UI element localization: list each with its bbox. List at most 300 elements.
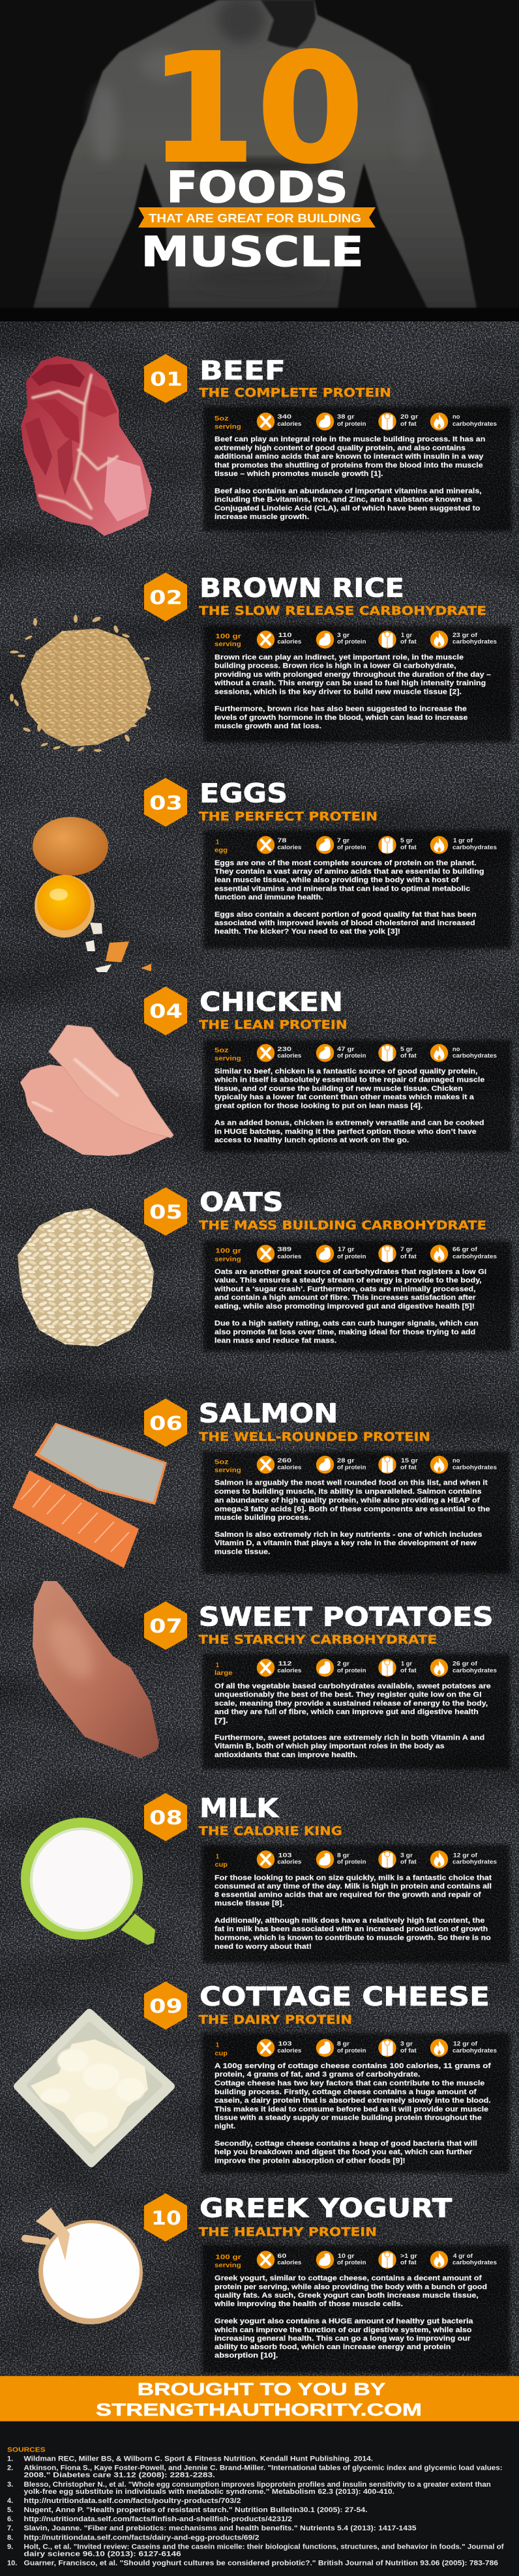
illustration: muscular torso <box>33 0 477 308</box>
serving size: 100 gr <box>215 2253 241 2261</box>
body text <box>214 1068 484 1144</box>
stat: fat: of fat <box>400 421 417 427</box>
sources section <box>7 2446 504 2568</box>
stat: fat <box>378 1044 417 1062</box>
number hexagon 07 <box>144 1601 187 1650</box>
body text: Furthermore, sweet potatoes are extremely rich in both Vitamin A and <box>215 1734 484 1741</box>
body text <box>215 1874 492 1951</box>
serving size <box>215 1046 241 1063</box>
stat: carbohydrates: 1 gr of <box>453 837 473 844</box>
body text: protein per serving, while also providing the body with a bunch of good <box>215 2283 487 2291</box>
stat: protein: of protein <box>337 844 366 850</box>
stat: carbohydrates: 66 gr of <box>452 1246 477 1252</box>
stat: carbohydrates: no <box>452 1046 460 1052</box>
eggshell fragments <box>85 923 151 972</box>
body text: without a ‘sugar crash’. Furthermore, oats are minimally processed, <box>214 1286 476 1294</box>
food image: salmon <box>12 1423 167 1568</box>
title word MUSCLE: MUSCLE <box>141 228 364 276</box>
stat: calories <box>257 1044 302 1062</box>
serving size: 1 <box>216 1661 219 1669</box>
body text: casein, a dairy protein that is absorbed extremely slowly into the blood. <box>215 2097 491 2105</box>
stat: protein: 17 gr <box>338 1246 355 1252</box>
body text: muscle building process. <box>215 1514 311 1522</box>
stat: carbohydrates: carbohydrates <box>452 1052 497 1059</box>
body text <box>215 859 484 936</box>
stat: carbohydrates: carbohydrates <box>452 1464 497 1470</box>
body text: Conjugated Linoleic Acid (CLA), all of which have been suggested to <box>215 505 481 512</box>
stat: calories: 260 <box>277 1457 291 1464</box>
stat: calories: 230 <box>277 1046 291 1052</box>
stat: protein: 2 gr <box>337 1661 350 1667</box>
stat: calories: calories <box>277 2259 302 2266</box>
body text: muscle tissue. <box>215 1548 271 1556</box>
serving size: serving <box>215 1055 241 1063</box>
stat: protein <box>316 1456 366 1473</box>
serving size: 5oz <box>215 415 229 422</box>
body text: levels of growth hormone in the blood, which can lead to increase <box>215 714 468 722</box>
stat: fat: 3 gr <box>400 1852 413 1858</box>
stat: protein: 8 gr <box>337 1852 350 1858</box>
orange ribbon banner <box>138 207 376 228</box>
body text <box>215 1682 491 1759</box>
body text: function and immune health. <box>215 893 323 901</box>
body text: night. <box>215 2123 235 2131</box>
serving size: serving <box>215 2261 241 2269</box>
number hexagon 08 <box>144 1793 187 1841</box>
food image: greek yogurt <box>21 2208 143 2324</box>
stat: fat <box>378 2039 417 2057</box>
stat: fat <box>378 1659 417 1677</box>
body text <box>215 1479 490 1556</box>
serving size: large <box>215 1669 233 1677</box>
stat: carbohydrates: carbohydrates <box>452 844 497 850</box>
stat: protein: of protein <box>337 1052 366 1059</box>
stat: protein: 38 gr <box>337 413 355 420</box>
number hexagon 01 <box>144 354 187 403</box>
heading: SALMON <box>198 1399 338 1429</box>
sources list: Blesso, Christopher N., et al. "Whole egg consumption improves lipoprotein profiles and insulin sensitivity to a greater extent than <box>23 2481 491 2489</box>
subheading: THE DAIRY PROTEIN <box>198 2013 352 2027</box>
stat: protein <box>316 1044 366 1062</box>
sources list: 2008." Diabetes care 31.12 (2008): 2281-2283. <box>23 2471 215 2479</box>
stat: carbohydrates: 23 gr of <box>452 632 477 638</box>
number hexagon 06 <box>144 1399 187 1447</box>
body text: This makes it ideal to consume before bed as it will provide our muscle <box>215 2106 488 2114</box>
number hexagon 07: 07 <box>149 1615 183 1637</box>
sources list: 7. <box>7 2524 13 2532</box>
serving size: 5oz <box>215 1458 229 1466</box>
stat: carbohydrates <box>430 630 497 649</box>
subheading: THE HEALTHY PROTEIN <box>198 2225 377 2239</box>
number hexagon 06: 06 <box>149 1412 183 1434</box>
stat: calories <box>257 1245 302 1263</box>
section 04 chicken <box>20 986 511 1156</box>
heading: MILK <box>200 1794 280 1824</box>
body text: Salmon is also extremely rich in key nutrients - one of which includes <box>215 1531 482 1539</box>
text panel <box>202 2245 510 2373</box>
stat: carbohydrates: carbohydrates <box>452 638 497 645</box>
stat: protein <box>316 1850 366 1869</box>
stat: calories: calories <box>277 1052 302 1059</box>
body text: Vitamin B, both of which play important roles in the body as <box>215 1742 445 1750</box>
sources list: http://nutritiondata.self.com/facts/finfish-and-shellfish-products/4231/2 <box>23 2515 292 2523</box>
stat: fat: 5 gr <box>400 837 413 844</box>
body text: Vitamin D, a vitamin that plays a key role in the development of new <box>215 1539 477 1547</box>
stat: carbohydrates: 4 gr of <box>453 2253 473 2259</box>
text panel <box>202 1844 510 1963</box>
body text <box>214 1268 486 1344</box>
stat: protein: 47 gr <box>337 1046 355 1052</box>
sources list: 1. <box>7 2455 13 2463</box>
stat: calories: 78 <box>277 837 287 844</box>
stat: fat: of fat <box>400 1052 417 1059</box>
body text: muscle tissue [8]. <box>215 1900 284 1908</box>
number hexagon 02 <box>144 572 187 621</box>
stat: calories <box>257 413 302 430</box>
stat: fat: 20 gr <box>400 413 419 420</box>
body text <box>214 2274 487 2360</box>
body text: As an added bonus, chicken is extremely versatile and can be cooked <box>215 1119 484 1127</box>
stat: fat: of fat <box>400 2259 417 2266</box>
text panel <box>203 1241 511 1352</box>
stat: calories: 60 <box>277 2253 287 2259</box>
text panel <box>203 406 511 531</box>
body text: Eggs are one of the most complete sources of protein on the planet. <box>215 859 477 867</box>
body text: value. This ensures a steady stream of energy is provide to the body, <box>215 1277 482 1284</box>
text panel <box>202 1451 510 1574</box>
number hexagon 02: 02 <box>149 587 183 609</box>
stat: protein <box>316 836 366 854</box>
body text: muscle growth and fat loss. <box>215 722 321 730</box>
sources list: 4. <box>7 2497 13 2505</box>
stat: fat: of fat <box>400 638 417 645</box>
stat: protein: 3 gr <box>337 632 350 638</box>
sources list: Holt, C., et al. "Invited review: Caseins and the casein micelle: their biological functions, structures, and behavior in foods." Journal of <box>23 2543 504 2551</box>
serving size <box>215 1247 241 1263</box>
body text: which can improve the function of our digestive system, while also <box>214 2326 472 2334</box>
body text: that promotes the shuttling of proteins from the blood into the muscle <box>215 462 483 469</box>
number hexagon 05 <box>144 1187 187 1236</box>
stat: fat: of fat <box>400 1253 417 1260</box>
sources heading: SOURCES <box>7 2446 46 2454</box>
sources list: 5. <box>7 2506 13 2514</box>
sources list: dairy science 96.10 (2013): 6127-6146 <box>23 2551 181 2558</box>
stat: fat: of fat <box>400 2047 417 2054</box>
stat: calories <box>257 836 302 854</box>
stat: carbohydrates: carbohydrates <box>452 1859 497 1865</box>
stat: calories <box>257 630 302 649</box>
body text: and contain a high amount of fibre. This increases satisfaction after <box>215 1294 476 1301</box>
body text: tissue, and of course the building of new muscle tissue. Chicken <box>215 1085 463 1093</box>
title word FOODS: FOODS <box>166 162 348 213</box>
stat: carbohydrates <box>430 836 497 854</box>
serving size: serving <box>215 640 241 648</box>
stat: calories: 103 <box>278 2041 292 2047</box>
stat: fat: 3 gr <box>400 2041 413 2047</box>
body text: which in itself is absolutely essential to the repair of damaged muscle <box>214 1076 484 1084</box>
body text: [7]. <box>215 1717 228 1725</box>
food image: cottage cheese <box>18 2013 171 2163</box>
body text: omega-3 fatty acids [6]. Both of these components are essential to the <box>215 1505 490 1513</box>
stat: protein <box>316 2039 366 2057</box>
header hero <box>0 0 519 321</box>
section 10 greek yogurt <box>21 2193 510 2373</box>
heading: SWEET POTATOES <box>198 1602 494 1632</box>
sources list: 3. <box>7 2481 13 2489</box>
stat: fat: of fat <box>400 1464 417 1470</box>
stat: calories <box>257 1850 302 1869</box>
serving size: 1 <box>216 2041 219 2049</box>
number hexagon 05: 05 <box>149 1201 183 1223</box>
stat: carbohydrates <box>430 1850 497 1869</box>
stat: protein: 28 gr <box>337 1457 355 1464</box>
body text: Salmon is arguably the most well rounded food on this list, and when it <box>215 1479 488 1487</box>
heading: GREEK YOGURT <box>200 2194 452 2224</box>
stat: carbohydrates <box>430 1659 497 1677</box>
stat: calories: calories <box>277 1253 302 1260</box>
food image: brown rice <box>10 615 151 752</box>
body text <box>215 2062 491 2165</box>
stat: fat: 7 gr <box>400 1246 413 1252</box>
sources list <box>7 2455 504 2568</box>
stat: fat <box>378 836 417 854</box>
body text: while improving the health of those muscle cells. <box>214 2300 403 2308</box>
stat: calories: calories <box>277 844 302 850</box>
stat: carbohydrates <box>430 413 497 430</box>
text panel <box>203 830 511 949</box>
stat: fat <box>378 1456 419 1473</box>
body text: increasing general health. This can go a long way to improving our <box>215 2335 471 2343</box>
subheading: THE STARCHY CARBOHYDRATE <box>198 1633 437 1647</box>
stat: fat <box>378 2251 418 2269</box>
body text: building process. Firstly, cottage cheese contains a huge amount of <box>215 2088 477 2096</box>
stat: calories: 389 <box>277 1246 291 1252</box>
body text: an abundance of high quality protein, while also providing a HEAP of <box>215 1497 480 1505</box>
stat: protein: of protein <box>337 2259 366 2266</box>
serving size: serving <box>215 1255 241 1263</box>
stat: fat <box>378 1850 417 1869</box>
sources list: Atkinson, Fiona S., Kaye Foster-Powell, and Jennie C. Brand-Miller. "International tables of glycemic index and glycemic load values: <box>23 2465 503 2472</box>
body text: lean muscle tissue, while also providing the body with a host of <box>215 876 459 884</box>
stat: calories: calories <box>277 638 302 645</box>
heading: EGGS <box>200 778 288 808</box>
body text: Beef also contains an abundance of important vitamins and minerals, <box>215 488 482 496</box>
stat: calories: calories <box>277 1667 302 1674</box>
body text: hormone, which is known to contribute to muscle growth. So there is no <box>215 1934 491 1942</box>
sources list: 8. <box>7 2534 13 2541</box>
body text: also promote fat loss over time, making ideal for those trying to add <box>215 1329 475 1337</box>
serving size <box>215 415 241 430</box>
serving size <box>215 1458 241 1474</box>
sources list: http://nutritiondata.self.com/facts/dairy-and-egg-products/69/2 <box>23 2534 260 2541</box>
text panel <box>202 1653 510 1769</box>
stat: protein: of protein <box>337 1253 366 1260</box>
body text: Furthermore, brown rice has also been suggested to increase the <box>215 705 467 713</box>
body text: protein, 4 grams of fat, and 3 grams of carbohydrate. <box>215 2071 421 2079</box>
number hexagon 03 <box>144 778 187 827</box>
sources list: 6. <box>7 2515 13 2523</box>
body text: ability to absorb food, which can increase energy and protein <box>215 2343 451 2351</box>
stat: calories <box>257 1456 302 1473</box>
cracked egg with yolk <box>35 875 95 938</box>
stat: protein <box>316 1659 366 1677</box>
stat: fat: 15 gr <box>401 1457 419 1464</box>
stat: carbohydrates <box>430 1245 497 1263</box>
section 06 salmon <box>12 1399 510 1574</box>
brought to you by banner: STRENGTHAUTHORITY.COM <box>96 2400 422 2420</box>
number hexagon 01: 01 <box>150 368 183 390</box>
serving size <box>215 2041 228 2058</box>
body text: Secondly, cottage cheese contains a heap of good bacteria that will <box>215 2140 477 2148</box>
heading: BROWN RICE <box>200 573 404 603</box>
body text: Greek yogurt also contains a HUGE amount of healthy gut bacteria <box>215 2317 473 2325</box>
stat: carbohydrates: 12 gr of <box>453 2041 477 2047</box>
section 02 brown rice <box>10 572 511 752</box>
stat: protein: of protein <box>337 1667 366 1674</box>
body text: For those looking to pack on size quickly, milk is a fantastic choice that <box>215 1874 492 1882</box>
sources list: 10. <box>7 2560 17 2568</box>
food image: milk mug <box>21 1818 155 1945</box>
whole egg <box>33 817 108 876</box>
sources list: yolk-free egg substitute in individuals with metabolic syndrome." Metabolism 62.3 (2013): 400-410. <box>23 2488 394 2496</box>
body text: including the B-vitamins, Iron, and Zinc, and a substance known as <box>215 496 472 503</box>
body text: health. The kicker? You need to eat the yolk [3]! <box>215 928 400 936</box>
stat: calories: calories <box>277 421 302 427</box>
number hexagon 09 <box>144 1981 187 2030</box>
section 01 beef <box>21 354 511 536</box>
body text: essential vitamins and minerals that can lead to optimal metabolic <box>215 885 470 893</box>
food image: beef <box>21 356 152 536</box>
serving size: egg <box>215 846 228 854</box>
stat: protein: of protein <box>337 421 366 427</box>
serving size: 100 gr <box>215 632 241 640</box>
stat: protein: 10 gr <box>338 2253 355 2259</box>
stat: fat: of fat <box>400 1859 417 1865</box>
body text: Additionally, although milk does have a relatively high fat content, the <box>215 1917 484 1925</box>
food image: chicken <box>20 1025 173 1156</box>
serving size: serving <box>215 422 241 430</box>
stat: carbohydrates <box>430 2039 497 2057</box>
stat: protein: of protein <box>337 1464 366 1470</box>
stat: fat: >1 gr <box>400 2253 418 2259</box>
body text: tissue with a steady supply or muscle building protein throughout the <box>215 2114 482 2122</box>
stat: protein <box>316 2251 366 2269</box>
number hexagon 04 <box>144 986 187 1035</box>
stat: carbohydrates: carbohydrates <box>452 1667 497 1674</box>
body text: sessions, which is the key driver to build new muscle tissue [2]. <box>215 688 462 696</box>
body text: access to healthy lunch options at work on the go. <box>215 1136 409 1144</box>
sources list: http://nutritiondata.self.com/facts/poultry-products/703/2 <box>23 2497 241 2505</box>
stat: calories: calories <box>277 1859 302 1865</box>
number hexagon 08: 08 <box>149 1807 183 1829</box>
body text: in HUGE batches, making it the perfect option those who don’t have <box>215 1128 477 1136</box>
stat: protein: of protein <box>337 2047 366 2054</box>
sources list: 2. <box>7 2465 13 2472</box>
body text: building process. Brown rice is high in a lower GI carbohydrate, <box>215 662 456 670</box>
serving size <box>215 838 228 854</box>
body text: lean mass and reduce fat mass. <box>215 1337 336 1344</box>
sources list: Slavin, Joanne. "Fiber and prebiotics: mechanisms and health benefits." Nutrients 5.4 (2013): 1417-1435 <box>23 2524 417 2532</box>
sources list: Guarner, Francisco, et al. "Should yoghurt cultures be considered probiotic?." British Journal of Nutrition 93.06 (2005): 783-786 <box>23 2560 498 2568</box>
stat: carbohydrates: carbohydrates <box>452 1253 497 1260</box>
stat: fat: 5 gr <box>400 1046 413 1052</box>
body text: providing us with prolonged energy throughout the duration of the day – <box>215 671 491 679</box>
subheading: THE WELL-ROUNDED PROTEIN <box>199 1430 430 1444</box>
stat: fat: 1 gr <box>401 632 413 638</box>
serving size <box>215 2253 241 2269</box>
stat: calories: calories <box>277 1464 302 1470</box>
body text: They contain a vast array of amino acids that are essential to building <box>215 868 484 876</box>
orange ribbon banner: THAT ARE GREAT FOR BUILDING <box>149 212 361 225</box>
stat: calories: 340 <box>277 413 291 420</box>
body text: associated with improved levels of blood cholesterol and increased <box>215 919 475 927</box>
brought to you by banner <box>0 2376 519 2421</box>
food image: sweet potato <box>33 1581 159 1758</box>
stat: calories: 112 <box>278 1661 292 1667</box>
text panel <box>203 625 511 743</box>
stat: fat <box>378 413 419 430</box>
body text: Oats are another great source of carbohydrates that registers a low GI <box>215 1268 486 1276</box>
number hexagon 10: 10 <box>151 2207 181 2229</box>
food image: oats <box>18 1208 154 1346</box>
body text: fat in milk has been associated with an increased production of growth <box>215 1925 488 1933</box>
sources list: Wildman REC, Miller BS, & Wilborn C. Sport & Fitness Nutrition. Kendall Hunt Publishing. 2014. <box>23 2455 373 2463</box>
section 09 cottage cheese <box>18 1981 510 2173</box>
stat: calories: calories <box>277 2047 302 2054</box>
body text: typically has a lower fat content than other meats which makes it a <box>215 1093 474 1101</box>
stat: carbohydrates <box>430 2251 497 2269</box>
sources list: 9. <box>7 2543 13 2551</box>
heading: OATS <box>200 1188 283 1218</box>
body text: antioxidants that can improve health. <box>215 1751 357 1759</box>
heading: COTTAGE CHEESE <box>200 1982 490 2012</box>
subheading: THE LEAN PROTEIN <box>199 1018 348 1032</box>
stat: carbohydrates: no <box>452 1457 460 1464</box>
body text: without a crash. This energy can be used to fuel high intensity training <box>214 679 486 687</box>
serving size: cup <box>215 1861 228 1869</box>
body text: absorption [10]. <box>215 2352 278 2360</box>
subheading: THE PERFECT PROTEIN <box>199 810 378 824</box>
body text: 8 essential amino acids that are required for the growth and repair of <box>215 1891 481 1899</box>
body text: Cottage cheese has two key factors that can contribute to the muscle <box>215 2080 484 2088</box>
body text: Of all the vegetable based carbohydrates available, sweet potatoes are <box>215 1682 491 1690</box>
body text: unquestionably the best of the best. They register quite low on the GI <box>215 1691 482 1699</box>
body text: scale, meaning they provide a sustained release of energy to the body, <box>215 1700 488 1708</box>
food image: eggs <box>33 817 151 972</box>
section 05 oats <box>18 1187 511 1352</box>
stat: calories <box>257 2251 302 2269</box>
stat: fat <box>378 1245 417 1263</box>
body text: help you breakdown and digest the food you eat, which can further <box>215 2148 472 2156</box>
stat: carbohydrates: no <box>452 413 460 420</box>
text panel <box>203 1040 511 1152</box>
body text: improve the protein absorption of other foods [9]! <box>215 2157 406 2165</box>
subheading: THE SLOW RELEASE CARBOHYDRATE <box>199 604 486 618</box>
sources list: Nugent, Anne P. "Health properties of resistant starch." Nutrition Bulletin30.1 (2005): 27-54. <box>23 2506 368 2514</box>
serving size: 100 gr <box>215 1247 241 1254</box>
stat: protein <box>316 1245 366 1263</box>
stat: protein <box>316 413 366 430</box>
subheading: THE CALORIE KING <box>198 1824 342 1839</box>
stat: protein <box>316 630 366 649</box>
stat: fat: of fat <box>400 844 417 850</box>
stat: protein: 7 gr <box>337 837 350 844</box>
body text: consumed at any time of the day. Milk is high in protein and contains all <box>215 1882 492 1890</box>
stat: protein: of protein <box>337 1859 366 1865</box>
section 07 sweet potatoes <box>33 1581 510 1769</box>
number hexagon 10 <box>144 2193 187 2242</box>
serving size: 1 <box>216 1853 219 1861</box>
